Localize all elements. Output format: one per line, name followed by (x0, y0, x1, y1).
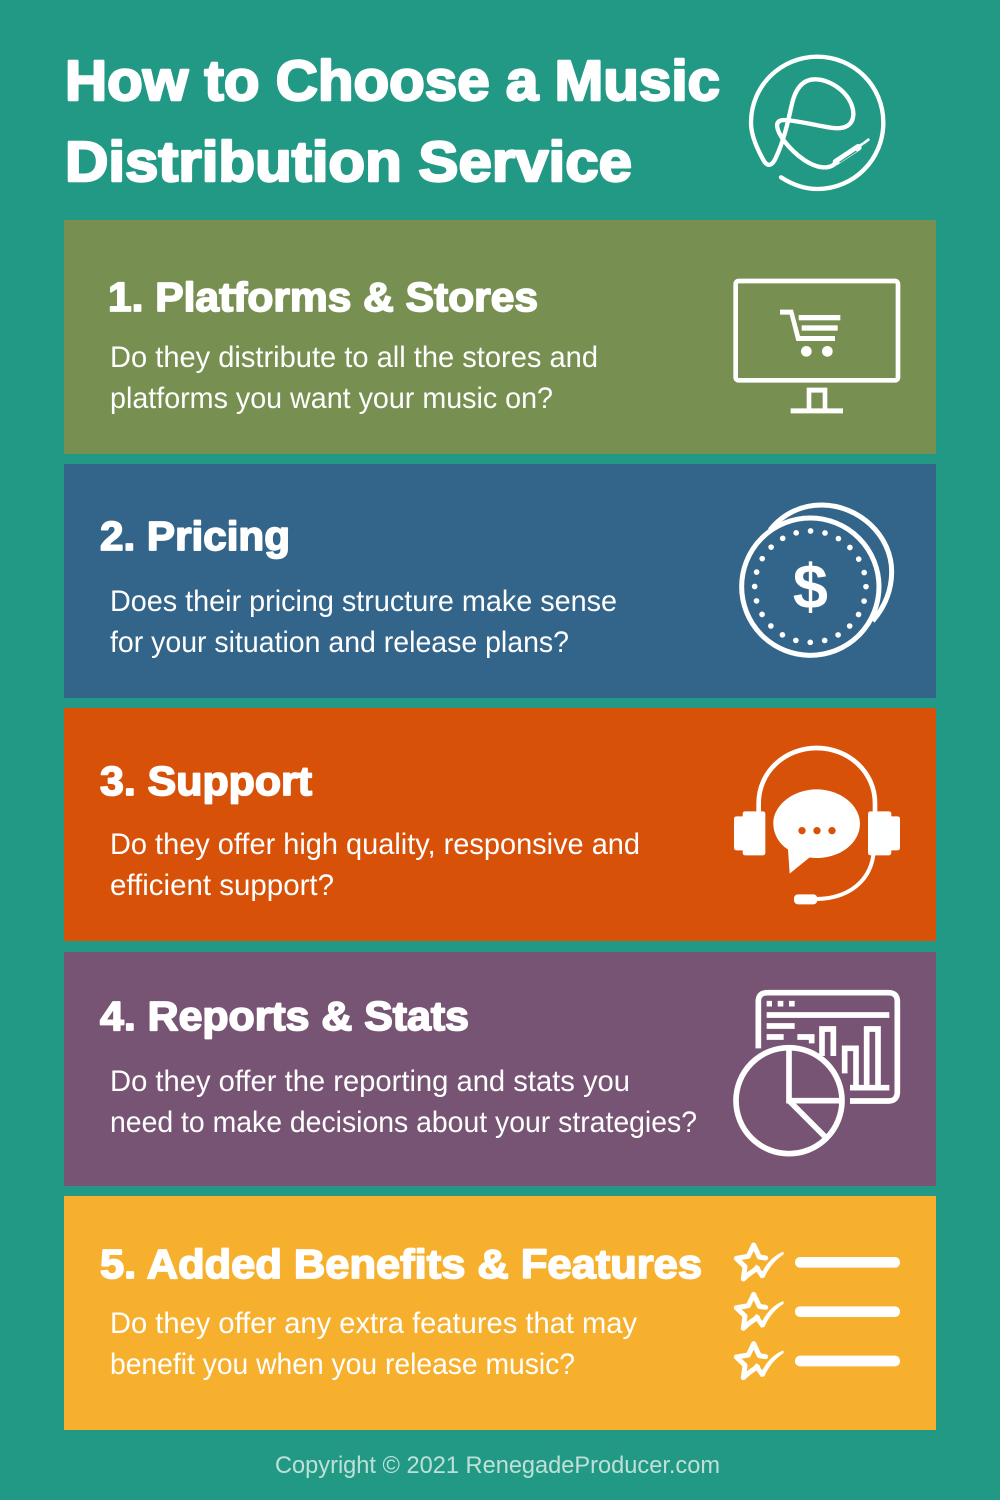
icon: monitor with cart (736, 281, 898, 413)
text: reports: Do they offer the reporting and stats you (110, 1065, 630, 1098)
text: reports: need to make decisions about your strategies? (110, 1106, 697, 1139)
text: platforms: Do they distribute to all the stores and (110, 341, 598, 374)
panel: added benefits and features (64, 1196, 936, 1430)
heading: pricing: 2. Pricing (100, 513, 290, 559)
text: pricing: Does their pricing structure make sense (110, 585, 617, 618)
text: support: efficient support? (110, 869, 334, 902)
icon: coins: $ (793, 553, 828, 623)
text: support (110, 828, 640, 902)
text: benefits: Do they offer any extra features that may (110, 1307, 637, 1340)
title (65, 49, 720, 194)
icon: logo (751, 57, 883, 189)
heading: support: 3. Support (100, 758, 312, 804)
title: How to Choose a Music (65, 49, 720, 113)
copyright footer: Copyright © 2021 RenegadeProducer.com (275, 1452, 720, 1479)
icon: starred checklist (736, 1245, 900, 1378)
title: Distribution Service (65, 130, 632, 194)
text: benefits: benefit you when you release music? (110, 1348, 575, 1381)
text: pricing (110, 585, 617, 659)
heading: platforms: 1. Platforms & Stores (108, 274, 538, 320)
panel: platforms and stores (64, 220, 936, 454)
icon: dashboard and pie chart (736, 993, 897, 1154)
panel: reports and stats (64, 952, 936, 1186)
text: reports (110, 1065, 697, 1139)
icon: coins (742, 505, 892, 655)
text: pricing: for your situation and release plans? (110, 626, 569, 659)
heading: reports: 4. Reports & Stats (100, 993, 469, 1039)
heading: benefits: 5. Added Benefits & Features (100, 1241, 702, 1287)
panel: support (64, 708, 936, 941)
text: benefits (110, 1307, 637, 1381)
icon: headset with speech bubble (734, 748, 900, 904)
panel: pricing (64, 464, 936, 698)
text: platforms: platforms you want your music on? (110, 382, 553, 415)
text: support: Do they offer high quality, responsive and (110, 828, 640, 861)
text: platforms (110, 341, 598, 415)
